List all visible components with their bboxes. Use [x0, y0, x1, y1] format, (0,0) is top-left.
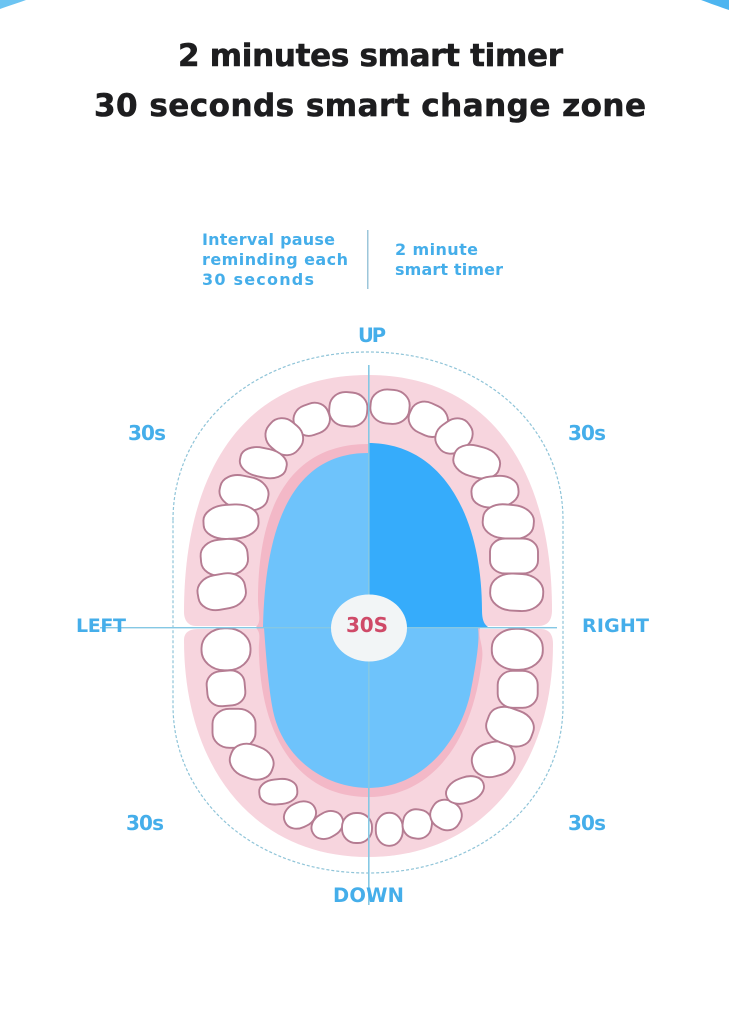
- legend: interval pause: [202, 230, 348, 289]
- lower palate ring: [256, 628, 482, 797]
- tongue: upper right zone: [368, 443, 488, 627]
- center badge: 30S: [346, 613, 388, 637]
- tongue: lower zones: [264, 628, 479, 788]
- legend: 2 minute smart timer: 2 minute: [395, 240, 478, 259]
- title: 2 minutes smart timer: [178, 38, 564, 74]
- direction label: RIGHT: RIGHT: [582, 615, 649, 637]
- teeth: lower right: [376, 629, 543, 846]
- time label: lower left: 30s: [126, 811, 164, 835]
- lower gum: [184, 629, 553, 857]
- axis lines: [100, 365, 557, 905]
- top right corner arc: [701, 0, 729, 10]
- direction label: LEFT: LEFT: [76, 615, 126, 637]
- dashed outline: [173, 352, 563, 873]
- legend: 2 minute smart timer: [395, 240, 503, 279]
- title: 30 seconds smart change zone: [94, 88, 646, 124]
- upper gum: [184, 375, 552, 626]
- legend: interval pause: 30 seconds: [202, 270, 314, 289]
- teeth: upper right: [369, 388, 544, 612]
- time label: lower right: 30s: [568, 811, 606, 835]
- top left corner arc: [0, 0, 26, 9]
- tongue: upper left zone: [263, 453, 368, 627]
- title: [94, 38, 646, 124]
- teeth: upper left: [195, 391, 369, 613]
- legend: interval pause: Interval pause: [202, 230, 335, 249]
- time label: upper left: 30s: [128, 421, 166, 445]
- legend: 2 minute smart timer: smart timer: [395, 260, 503, 279]
- center badge: [331, 594, 407, 662]
- legend divider: [367, 230, 368, 289]
- time label: upper right: 30s: [568, 421, 606, 445]
- teeth: lower left: [202, 628, 372, 844]
- legend: interval pause: reminding each: [202, 250, 348, 269]
- direction label: DOWN: DOWN: [333, 884, 404, 907]
- direction label: UP: UP: [358, 324, 386, 347]
- upper palate ring: [256, 444, 368, 627]
